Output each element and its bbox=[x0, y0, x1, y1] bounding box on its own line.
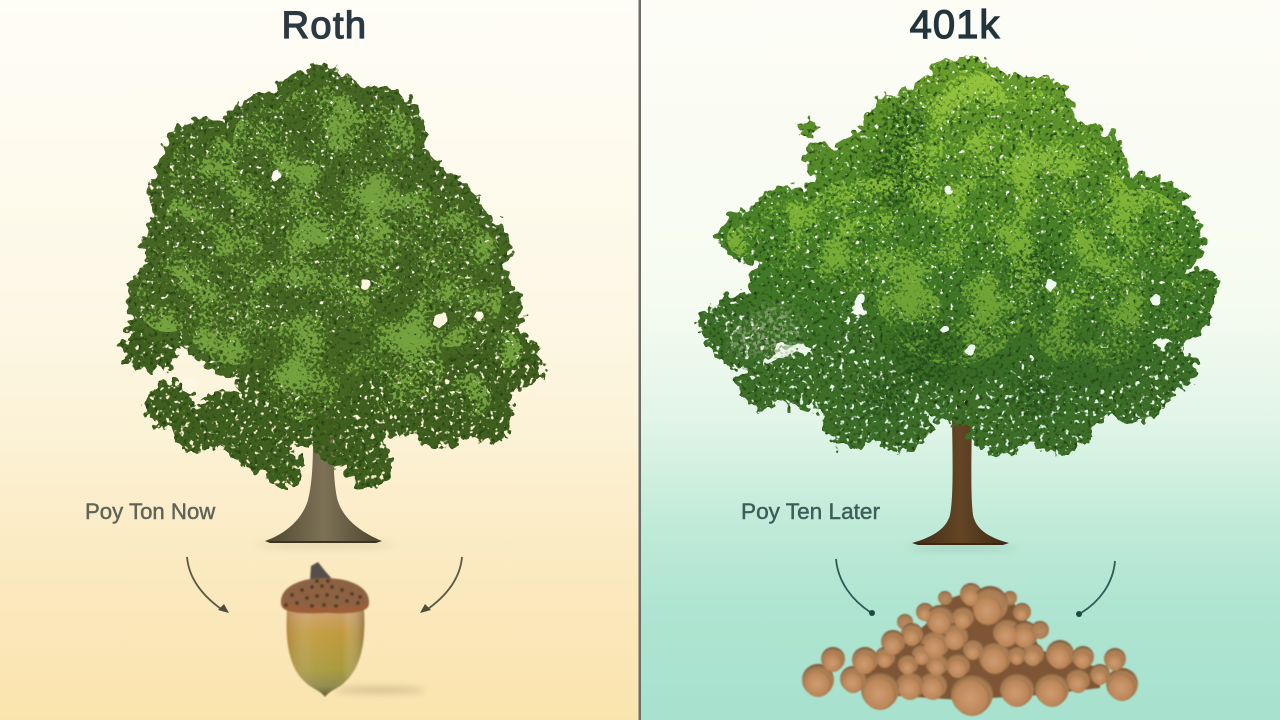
arrow: left into acorn bbox=[187, 557, 229, 613]
illustration: Roth oak tree bbox=[122, 67, 542, 548]
label: Pay tax later: Poy Ten Later bbox=[741, 499, 880, 524]
panel: 401k background bbox=[641, 0, 1280, 720]
arrow: right into acorn pile bbox=[1076, 561, 1115, 617]
icon: pile of acorns bbox=[802, 583, 1138, 716]
arrow: right into acorn bbox=[420, 557, 462, 613]
heading: 401k: 401k bbox=[910, 3, 1000, 47]
illustration: 401k tree bbox=[697, 57, 1219, 551]
divider line bbox=[638, 0, 641, 720]
heading: Roth: Roth bbox=[282, 5, 367, 47]
label: Pay tax now: Poy Ton Now bbox=[85, 499, 216, 524]
panel: Roth background bbox=[0, 0, 639, 720]
arrow: left into acorn pile bbox=[836, 559, 875, 616]
icon: single acorn bbox=[281, 562, 425, 697]
